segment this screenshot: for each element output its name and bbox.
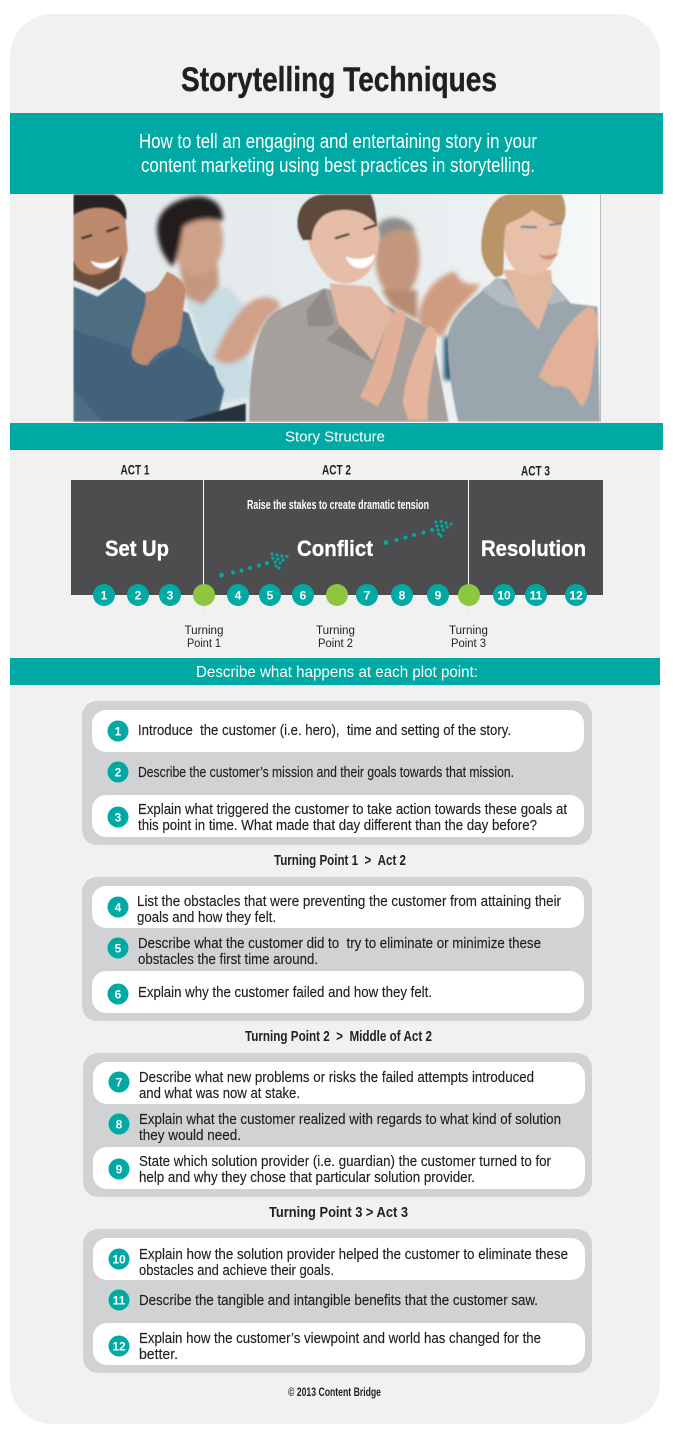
turning point labels: Point 1 — [187, 638, 221, 650]
point 1: 1 — [115, 724, 122, 738]
plot point markers: 10 — [497, 588, 511, 602]
dotted arrow 2 — [384, 520, 453, 545]
subtitle banner: How to tell an engaging and entertaining story in your — [139, 131, 537, 153]
point 1 — [108, 720, 511, 742]
point 9: help and why they chose that particular solution provider. — [139, 1170, 475, 1186]
section band: plot points — [10, 658, 660, 685]
plot point markers: 9 — [435, 588, 442, 602]
act names: Resolution — [481, 536, 586, 561]
act dividers — [203, 480, 469, 617]
point 8: Explain what the customer realized with regards to what kind of solution — [139, 1112, 561, 1128]
point 2 — [108, 762, 514, 782]
point 4: List the obstacles that were preventing the customer from attaining their — [137, 894, 561, 910]
turning point labels: Turning — [449, 625, 488, 637]
point 11: 11 — [113, 1294, 126, 1308]
title: Storytelling Techniques — [181, 61, 497, 99]
heading: turning point 3: Turning Point 3 > Act 3 — [269, 1204, 408, 1221]
photo: business people applauding — [73, 194, 600, 422]
point 3: Explain what triggered the customer to take action towards these goals at — [138, 802, 567, 818]
act labels — [120, 462, 550, 478]
photo right edge — [600, 194, 601, 422]
panel: act 1 plot points — [82, 701, 592, 845]
plot point markers: 7 — [364, 588, 371, 602]
point 10: obstacles and achieve their goals. — [139, 1263, 334, 1279]
point 5: 5 — [115, 942, 122, 956]
man in background left — [157, 197, 280, 403]
plot point markers: 11 — [530, 588, 543, 602]
dark act block — [71, 480, 603, 595]
man in background right — [375, 218, 480, 380]
point 3 — [108, 802, 567, 834]
point 7: 7 — [116, 1076, 123, 1090]
turning point labels: Point 3 — [451, 638, 486, 650]
story structure diagram — [71, 462, 603, 650]
point 3: 3 — [115, 810, 122, 824]
act labels: ACT 1 — [120, 462, 150, 478]
turning point labels: Turning — [184, 625, 224, 637]
plot point markers: 12 — [569, 588, 583, 602]
subtitle banner — [10, 113, 663, 194]
woman in centre — [249, 195, 449, 422]
point 8: they would need. — [139, 1128, 241, 1144]
subtitle banner: content marketing using best practices in storytelling. — [141, 155, 535, 177]
point 9: State which solution provider (i.e. guardian) the customer turned to for — [139, 1154, 551, 1170]
turning point labels: Turning — [316, 625, 355, 637]
point 1: Introduce the customer (i.e. hero), time and setting of the story. — [138, 723, 511, 739]
point 6 — [108, 984, 432, 1004]
point 5: Describe what the customer did to try to eliminate or minimize these — [138, 936, 541, 952]
point 7: Describe what new problems or risks the failed attempts introduced — [139, 1070, 534, 1086]
point 9 — [108, 1154, 551, 1186]
point 12 — [108, 1331, 541, 1363]
point 11 — [108, 1290, 538, 1310]
panel: act 2 second half — [83, 1053, 592, 1197]
dotted arrow 1 — [219, 552, 289, 577]
plot point markers — [93, 584, 587, 606]
tension caption: Raise the stakes to create dramatic tension — [247, 498, 429, 512]
point 5 — [108, 936, 541, 968]
point 7: and what was now at stake. — [139, 1086, 300, 1102]
point 8 — [108, 1112, 561, 1144]
woman on the right — [447, 195, 600, 422]
section band: story structure — [10, 423, 663, 450]
turning point labels: Point 2 — [318, 638, 353, 650]
heading: turning point 2: Turning Point 2 > Middle of Act 2 — [245, 1028, 432, 1045]
plot point markers: 5 — [267, 588, 274, 602]
act names — [105, 536, 586, 561]
point 10 — [108, 1247, 568, 1279]
plot point markers: 3 — [167, 588, 174, 602]
section band: plot points: Describe what happens at each plot point: — [196, 664, 478, 681]
point 8: 8 — [116, 1118, 123, 1132]
point 4: goals and how they felt. — [137, 910, 276, 926]
point 5: obstacles the first time around. — [138, 952, 318, 968]
point 11: Describe the tangible and intangible benefits that the customer saw. — [139, 1293, 538, 1309]
point 7 — [108, 1070, 534, 1102]
section band: story structure: Story Structure — [285, 428, 385, 446]
footer copyright: © 2013 Content Bridge — [288, 1385, 381, 1399]
point 3: this point in time. What made that day different than the day before? — [138, 818, 537, 834]
point 12: better. — [139, 1347, 178, 1363]
act names: Conflict — [297, 536, 374, 561]
point 6: 6 — [115, 988, 122, 1002]
point 4 — [108, 894, 561, 926]
plot point markers: 8 — [399, 588, 406, 602]
man in foreground left — [74, 195, 246, 422]
heading: turning point 1: Turning Point 1 > Act 2 — [274, 852, 406, 869]
act labels: ACT 2 — [322, 462, 351, 478]
panel: act 2 first half — [82, 877, 592, 1021]
turning point labels — [184, 625, 488, 650]
point 6: Explain why the customer failed and how they felt. — [138, 985, 432, 1001]
act names: Set Up — [105, 536, 169, 561]
point 12: 12 — [112, 1340, 126, 1354]
panel: act 3 plot points — [83, 1229, 592, 1373]
plot point markers: 1 — [101, 588, 108, 602]
point 12: Explain how the customer’s viewpoint and world has changed for the — [139, 1331, 541, 1347]
plot point markers: 4 — [235, 588, 242, 602]
plot point markers: 6 — [300, 588, 307, 602]
act labels: ACT 3 — [521, 462, 550, 478]
point 9: 9 — [116, 1162, 123, 1176]
point 2: Describe the customer’s mission and their goals towards that mission. — [138, 765, 514, 781]
point 10: 10 — [112, 1252, 126, 1266]
plot point markers: 2 — [135, 588, 142, 602]
point 4: 4 — [115, 900, 122, 914]
point 2: 2 — [115, 766, 122, 780]
point 10: Explain how the solution provider helped the customer to eliminate these — [139, 1247, 568, 1263]
